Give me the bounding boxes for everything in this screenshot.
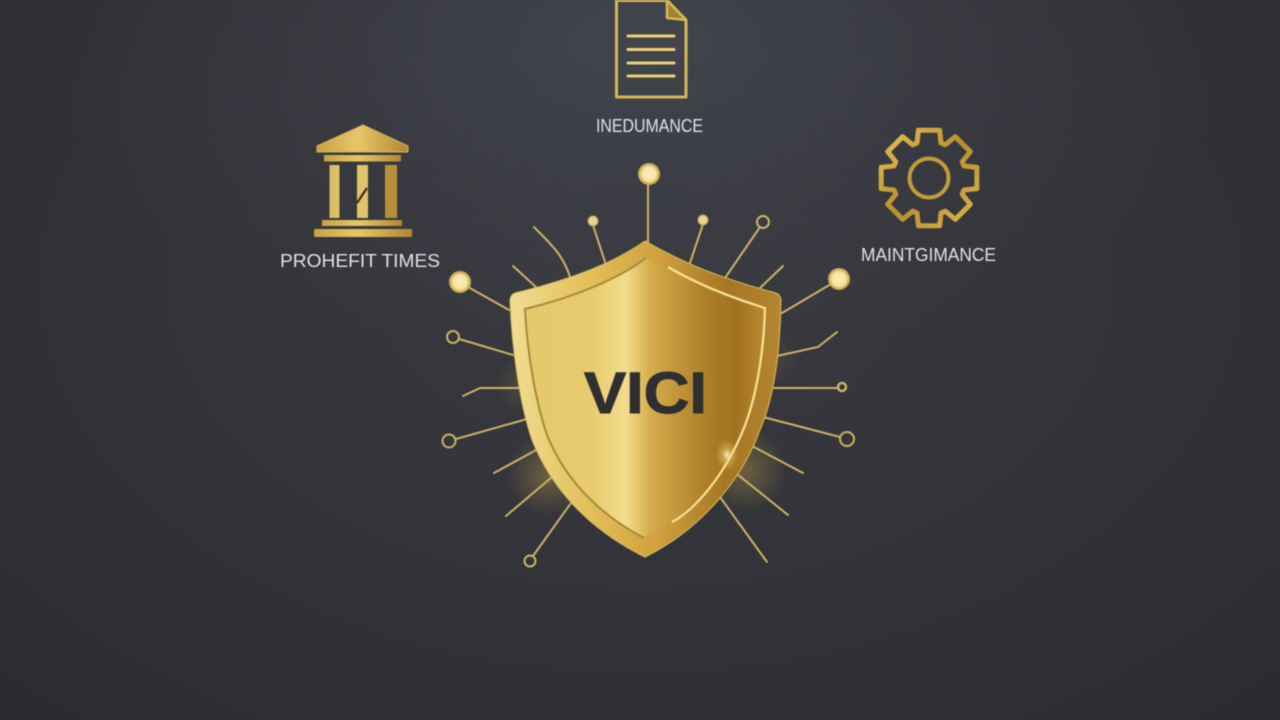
node: open ring right middle bbox=[838, 383, 846, 391]
node: top bbox=[639, 164, 659, 184]
label: bank: PROHEFIT TIMES bbox=[280, 250, 440, 271]
label: gear: MAINTGIMANCE bbox=[861, 244, 996, 265]
icon: document bbox=[616, 0, 686, 97]
shield title: VICI bbox=[584, 361, 707, 426]
sparkle bbox=[716, 439, 738, 471]
shield inner line left bbox=[525, 258, 646, 538]
rays and nodes bbox=[442, 164, 854, 566]
glow behind shield bbox=[495, 334, 801, 517]
node: open ring top right bbox=[757, 216, 769, 228]
icon: gear bbox=[881, 130, 977, 226]
node: small left bbox=[588, 216, 598, 226]
label: document: INEDUMANCE bbox=[596, 115, 703, 136]
shield face bbox=[525, 258, 765, 538]
icon: bank bbox=[314, 125, 412, 237]
node: small right bbox=[698, 215, 708, 225]
node: big left bbox=[450, 272, 470, 292]
node: open ring left upper bbox=[447, 331, 459, 343]
shield rim bbox=[510, 241, 781, 557]
shield inner line bbox=[668, 267, 765, 522]
node: open ring left lower bbox=[442, 434, 456, 448]
node: big right bbox=[829, 269, 849, 289]
node: open ring bottom left bbox=[524, 556, 536, 566]
node: open ring right lower bbox=[840, 432, 854, 446]
shield bbox=[510, 241, 781, 557]
